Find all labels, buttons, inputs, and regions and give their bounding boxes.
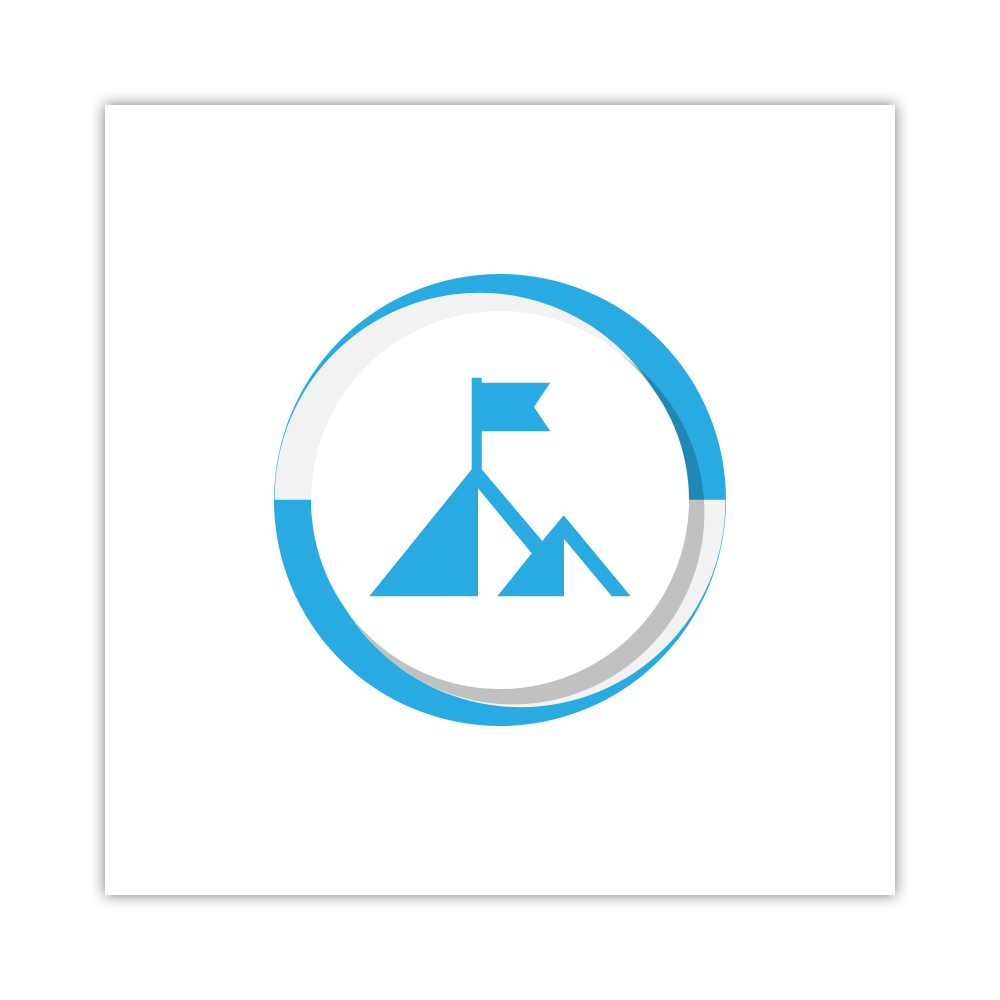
panel: white card with drop shadow (105, 105, 895, 895)
ring: blue outer disc (274, 274, 726, 726)
ring: light grey lower-right swirl (345, 500, 726, 708)
icon badge: circular ring with mountain and flag (274, 274, 726, 726)
ring: white centre disc (311, 311, 689, 689)
icon: mountain peaks with flag (369, 378, 631, 596)
ring: inner drop shadow crescent (321, 321, 704, 704)
ring: light grey upper-left swirl (274, 292, 655, 500)
